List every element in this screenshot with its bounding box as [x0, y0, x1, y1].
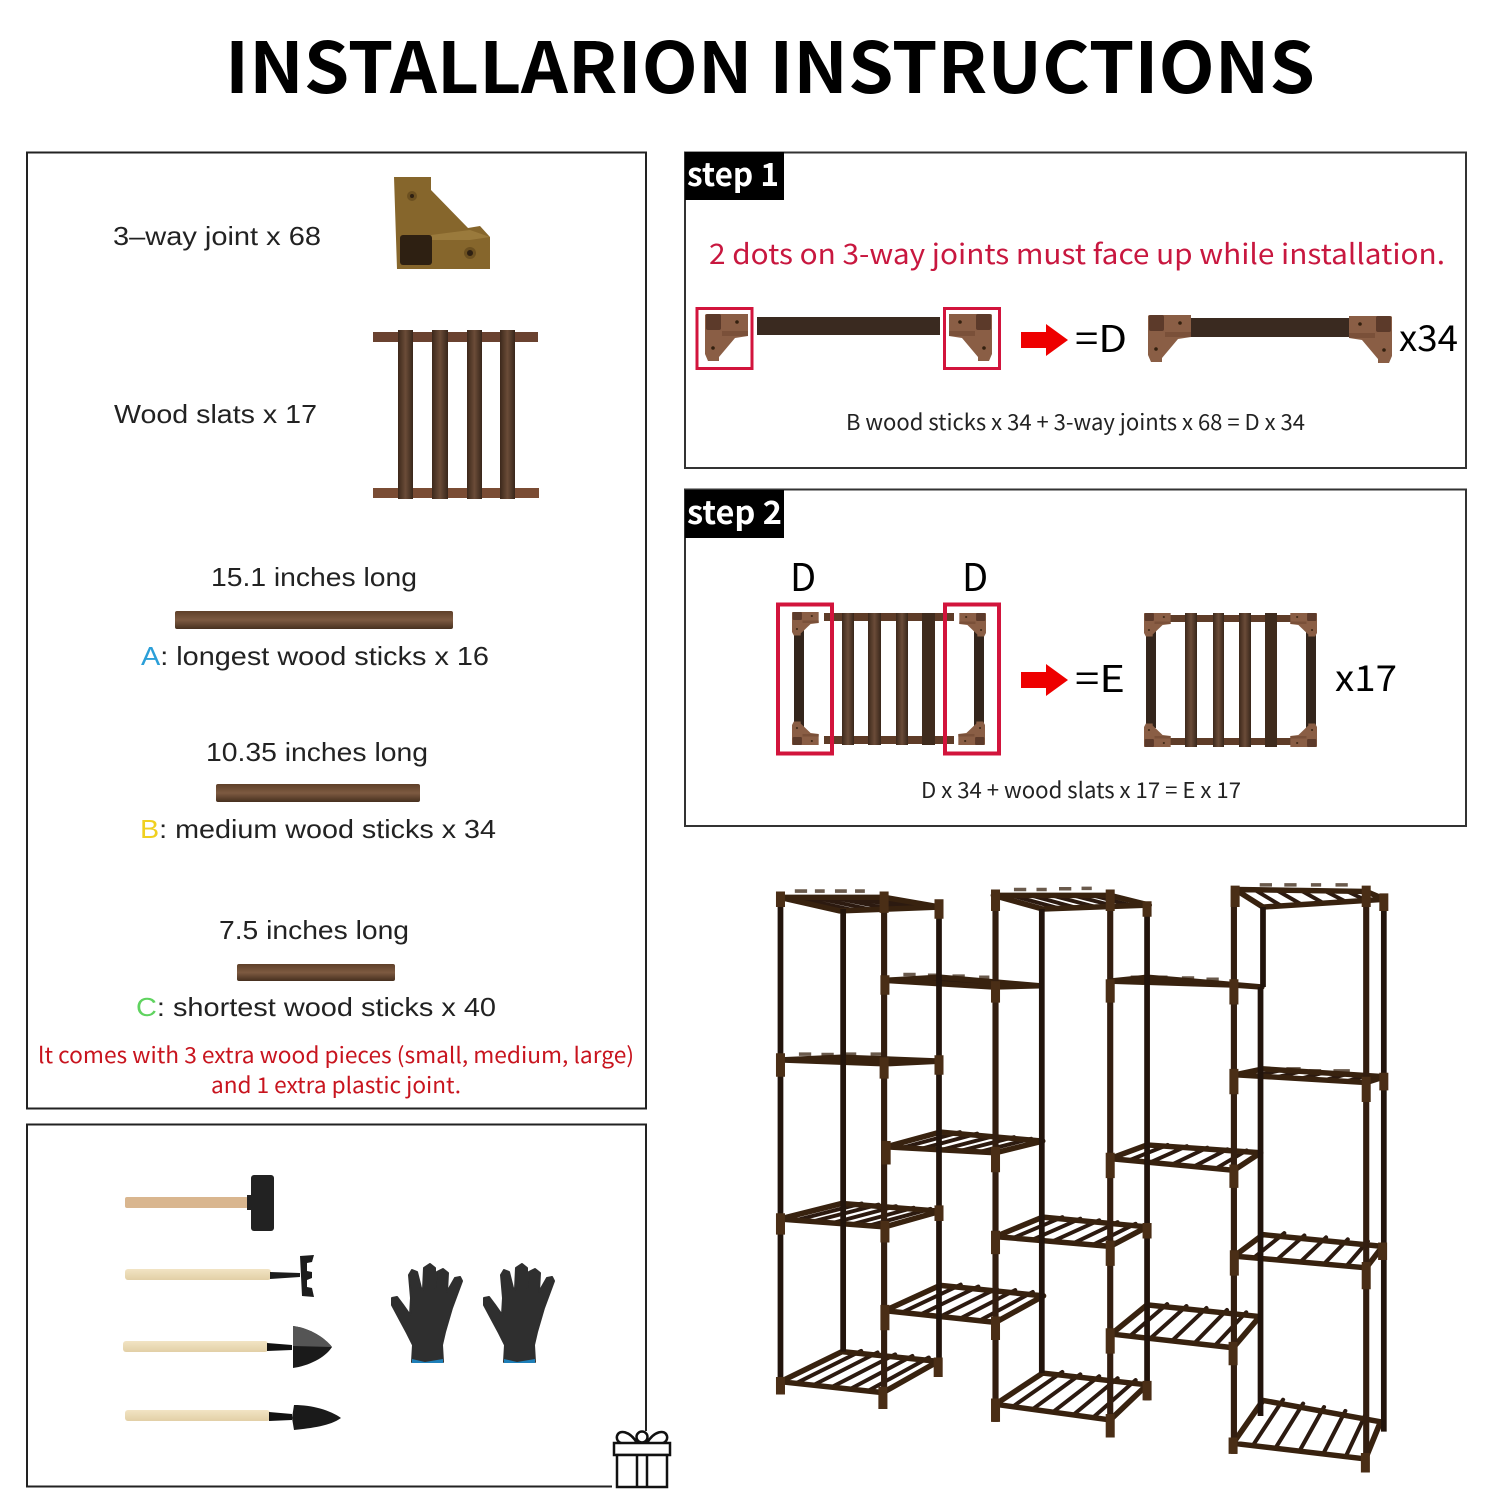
highlighted right D: [945, 604, 999, 754]
label: 3-way joint count: 3–way joint x 68: [113, 221, 321, 251]
badge: step 1: step 1: [687, 150, 779, 196]
panel: step 2: [685, 488, 1466, 826]
back posts: [780, 895, 1384, 1432]
stick A: [175, 611, 453, 629]
label: left D: D: [790, 547, 816, 602]
label: C length: 7.5 inches long: [219, 915, 409, 945]
panel: tools: [27, 1124, 670, 1490]
panel: step 1: [685, 150, 1466, 468]
label: A sticks: A: longest wood sticks x 16: [141, 641, 489, 671]
assembled E part: [1144, 613, 1317, 747]
icon: rake: [125, 1255, 314, 1297]
shelf slats: [795, 890, 1368, 1457]
highlighted left joint: [697, 308, 752, 368]
highlighted left D: [778, 604, 832, 754]
title: INSTALLARION INSTRUCTIONS: [225, 13, 1315, 114]
panel: parts list: [27, 152, 646, 1108]
label: B length: 10.35 inches long: [206, 737, 428, 767]
label: right D: D: [962, 547, 988, 602]
badge: step 2: step 2: [687, 488, 782, 534]
icon: wood slats: [373, 330, 539, 499]
equation: D x 34 + wood slats x 17 = E x 17: [921, 773, 1241, 805]
instruction text: 2 dots on 3-way joints must face up while installation.: [709, 233, 1445, 273]
label: B sticks: B: medium wood sticks x 34: [140, 814, 496, 844]
slat tips on top shelves: [795, 885, 1350, 1071]
highlighted right joint: [944, 308, 1000, 368]
front posts: [884, 890, 1366, 1473]
label: A length: 15.1 inches long: [211, 562, 417, 592]
plastic joints: [780, 886, 1384, 1473]
stick B: [757, 317, 940, 335]
stick B: [216, 784, 420, 802]
assembled D part: [1148, 315, 1392, 363]
label: C sticks: C: shortest wood sticks x 40: [136, 992, 496, 1022]
shelf frames: [780, 890, 1385, 1459]
icon: 3-way joint: [394, 177, 490, 269]
arrow: [1021, 324, 1068, 356]
assembled plant stand: [780, 885, 1385, 1473]
note: extras line 1: lt comes with 3 extra wood pieces (small, medium, large): [38, 1038, 634, 1070]
label: =E: =E: [1075, 649, 1125, 703]
arrow: [1021, 664, 1068, 696]
label: x17: x17: [1335, 650, 1397, 702]
note: extras line 2: and 1 extra plastic joint.: [211, 1068, 461, 1100]
icon: trowel: [125, 1405, 341, 1430]
icon: hammer: [125, 1175, 274, 1231]
equation: B wood sticks x 34 + 3-way joints x 68 = D x 34: [846, 405, 1305, 437]
label: x34: x34: [1399, 310, 1458, 362]
label: wood slats count: Wood slats x 17: [114, 399, 317, 429]
label: =D: =D: [1075, 309, 1127, 363]
stick C: [237, 964, 395, 981]
icon: shovel: [123, 1326, 332, 1368]
icon: right glove: [484, 1264, 554, 1363]
wood slat piece: [824, 613, 954, 745]
icon: gift box: [612, 1431, 670, 1490]
icon: left glove: [392, 1264, 462, 1363]
